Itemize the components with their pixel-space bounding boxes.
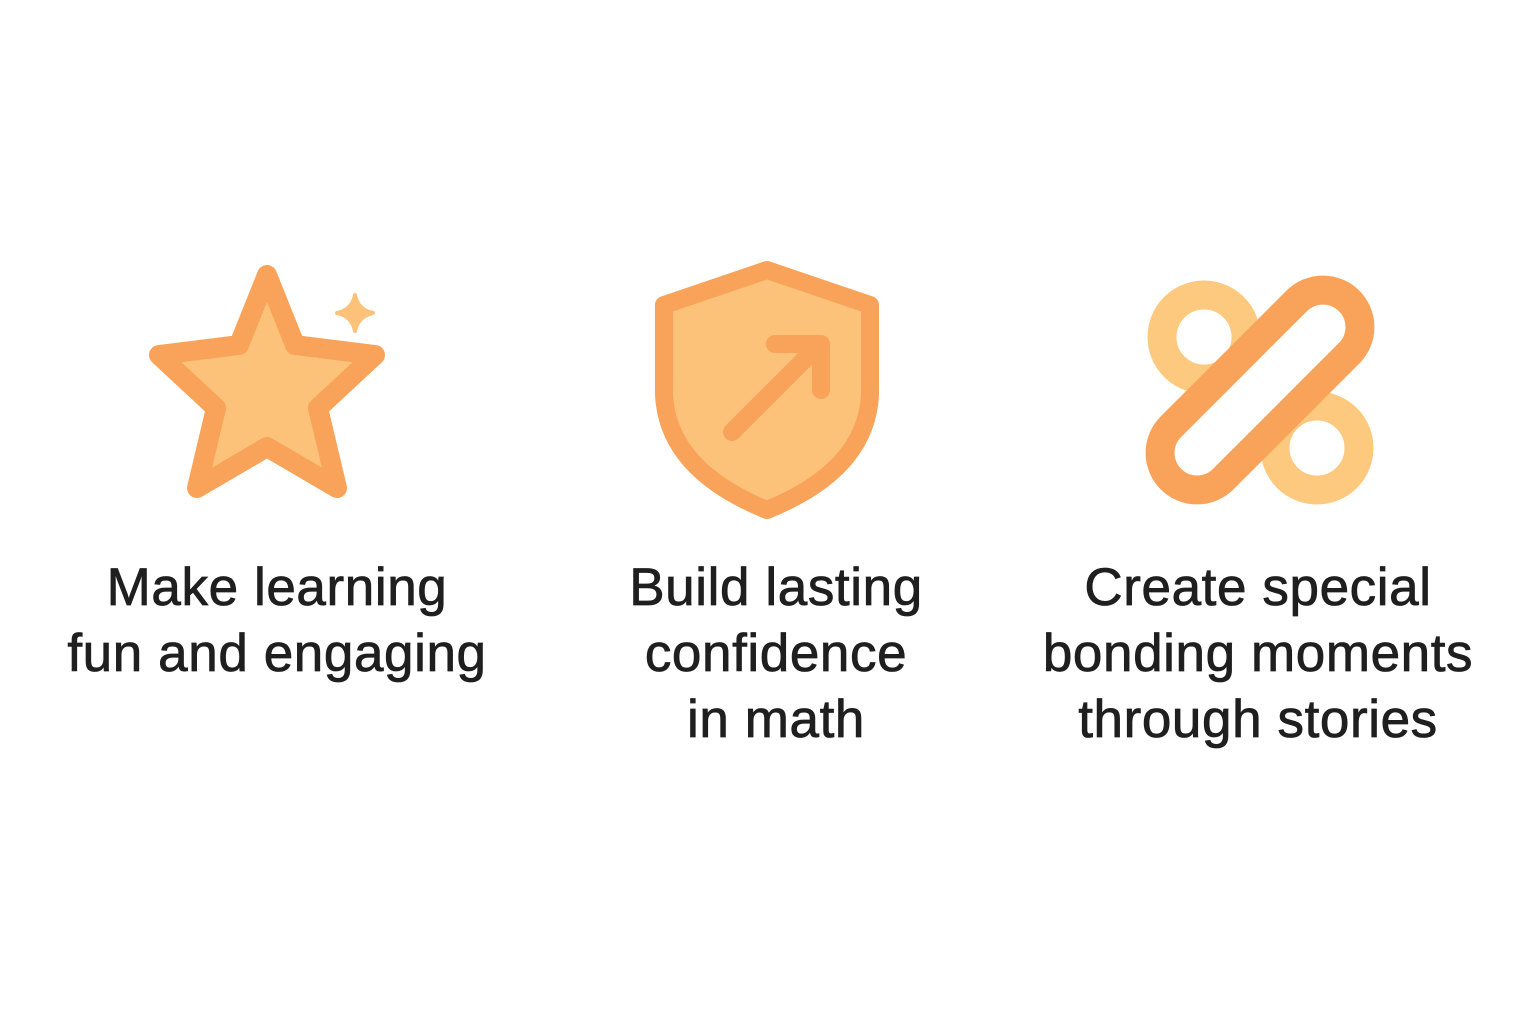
text: build confidence: Build lasting	[629, 558, 923, 617]
text: bonding moments: bonding moments	[1043, 624, 1473, 683]
icon: shield with arrow	[664, 270, 870, 510]
text: build confidence	[629, 558, 923, 749]
icon: star with sparkle	[159, 275, 375, 488]
text: bonding moments: Create special	[1084, 558, 1432, 617]
text: bonding moments	[1043, 558, 1473, 749]
icon: linked loops	[1145, 275, 1375, 505]
text: build confidence: in math	[687, 690, 865, 749]
text: make learning fun: fun and engaging	[67, 624, 487, 683]
text: make learning fun	[67, 558, 487, 683]
text: make learning fun: Make learning	[107, 558, 447, 617]
text: bonding moments: through stories	[1078, 690, 1438, 749]
text: build confidence: confidence	[645, 624, 907, 683]
